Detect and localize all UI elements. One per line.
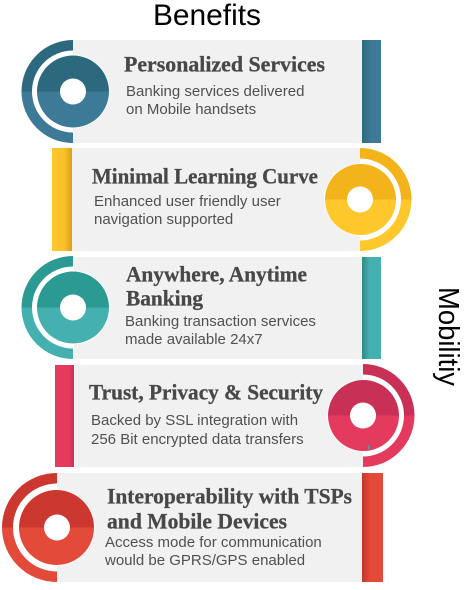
heading: Personalized Services (124, 52, 325, 76)
description: Banking transaction services (125, 313, 316, 330)
panel: Anywhere, Anytime Banking (22, 256, 381, 359)
panel: Trust, Privacy & Security (55, 364, 414, 467)
description: Banking services delivered (126, 83, 304, 100)
left bar: pink (55, 365, 74, 467)
right bar: teal (362, 257, 381, 359)
heading: Interoperability with TSPs (107, 484, 352, 508)
description: Backed by SSL integration with (91, 412, 298, 429)
icon: pink ring (327, 364, 414, 467)
icon: yellow ring (324, 148, 412, 251)
description: made available 24x7 (125, 331, 263, 348)
heading: Anywhere, Anytime (126, 262, 307, 286)
description: would be GPRS/GPS enabled (104, 552, 305, 569)
description: navigation supported (94, 211, 233, 228)
heading: Trust, Privacy & Security (89, 380, 324, 404)
icon: blue ring (22, 40, 110, 143)
right bar: red (362, 473, 383, 582)
panel: Interoperability with TSPs (2, 473, 383, 582)
description: Access mode for communication (105, 534, 322, 551)
icon: red ring (2, 473, 95, 582)
panel: Minimal Learning Curve (52, 148, 412, 251)
heading: Minimal Learning Curve (92, 164, 318, 188)
right bar: blue (362, 40, 381, 143)
panel: Personalized Services (22, 40, 381, 143)
heading: Banking (126, 286, 204, 310)
description: Enhanced user friendly user (94, 193, 281, 210)
icon: teal ring (22, 256, 110, 359)
description: 256 Bit encrypted data transfers (91, 431, 304, 448)
side label: Mobility: Mobilitiy (432, 287, 464, 386)
heading: and Mobile Devices (107, 508, 287, 534)
description: on Mobile handsets (126, 101, 256, 118)
left bar: yellow (52, 148, 72, 251)
